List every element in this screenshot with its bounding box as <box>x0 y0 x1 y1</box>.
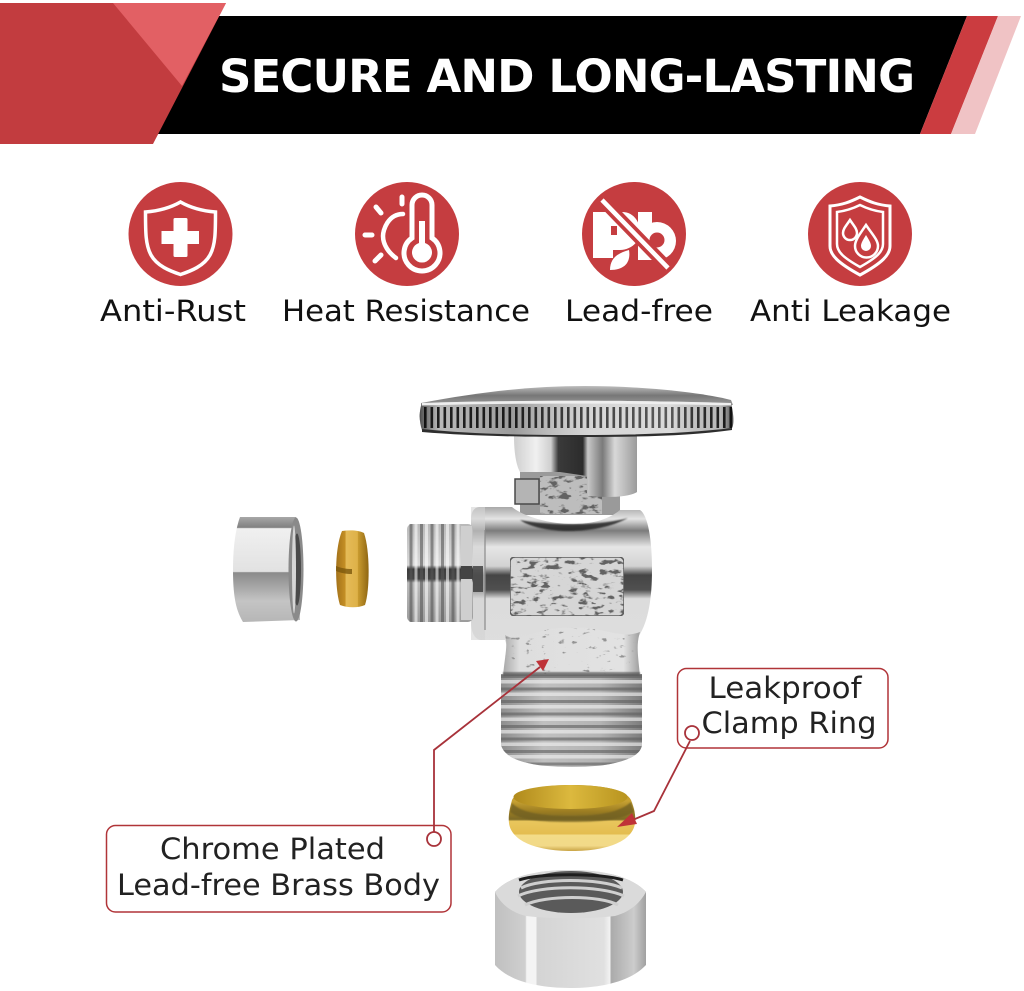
illustration: chrome angle valve <box>407 386 733 767</box>
illustration: left brass ring <box>336 530 369 607</box>
handle <box>420 386 733 437</box>
header banner <box>0 3 1021 144</box>
callout: Chrome Plated Lead-free Brass Body <box>106 659 549 912</box>
header right pink stripe <box>951 16 1021 134</box>
callout box <box>106 826 451 912</box>
valve stem <box>514 436 637 497</box>
callout text second line: Clamp Ring <box>702 706 876 740</box>
header left red block <box>0 3 226 144</box>
feature: Anti Leakage <box>750 182 951 328</box>
feature: Anti-Rust <box>100 182 246 328</box>
label: Lead-free: Lead-free <box>565 294 713 328</box>
valve collar <box>515 470 620 515</box>
callout box <box>678 668 888 748</box>
arrow: to valve body <box>427 659 549 846</box>
illustration: brass clamp ring <box>509 785 635 851</box>
icon: shield with cross <box>128 182 232 286</box>
lower thread <box>501 672 642 767</box>
label: Anti Leakage: Anti Leakage <box>750 294 951 328</box>
illustration: left chrome nut <box>233 517 304 622</box>
arrow: to clamp ring <box>617 726 699 827</box>
callout text: Chrome Plated <box>160 832 385 866</box>
label: Anti-Rust: Anti-Rust <box>100 294 246 328</box>
header black bar <box>140 16 967 134</box>
icon: sun and thermometer <box>355 182 459 286</box>
left thread <box>407 524 473 622</box>
icon: crossed Pb with leaf <box>582 182 686 286</box>
title: SECURE AND LONG-LASTING <box>219 50 915 103</box>
valve body <box>471 507 652 655</box>
callout text: Leakproof <box>708 671 862 705</box>
header left light facet <box>113 3 226 86</box>
valve neck <box>503 628 640 676</box>
feature: Lead-free <box>565 182 713 328</box>
feature: Heat Resistance <box>282 182 530 328</box>
label: Heat Resistance: Heat Resistance <box>282 294 530 328</box>
callout: Leakproof Clamp Ring <box>617 668 888 827</box>
icon: shield with water drops <box>808 182 912 286</box>
header right red stripe <box>920 16 998 134</box>
illustration: bottom chrome nut <box>495 870 646 988</box>
callout text second line: Lead-free Brass Body <box>117 868 440 902</box>
valve body label recess <box>510 557 624 616</box>
